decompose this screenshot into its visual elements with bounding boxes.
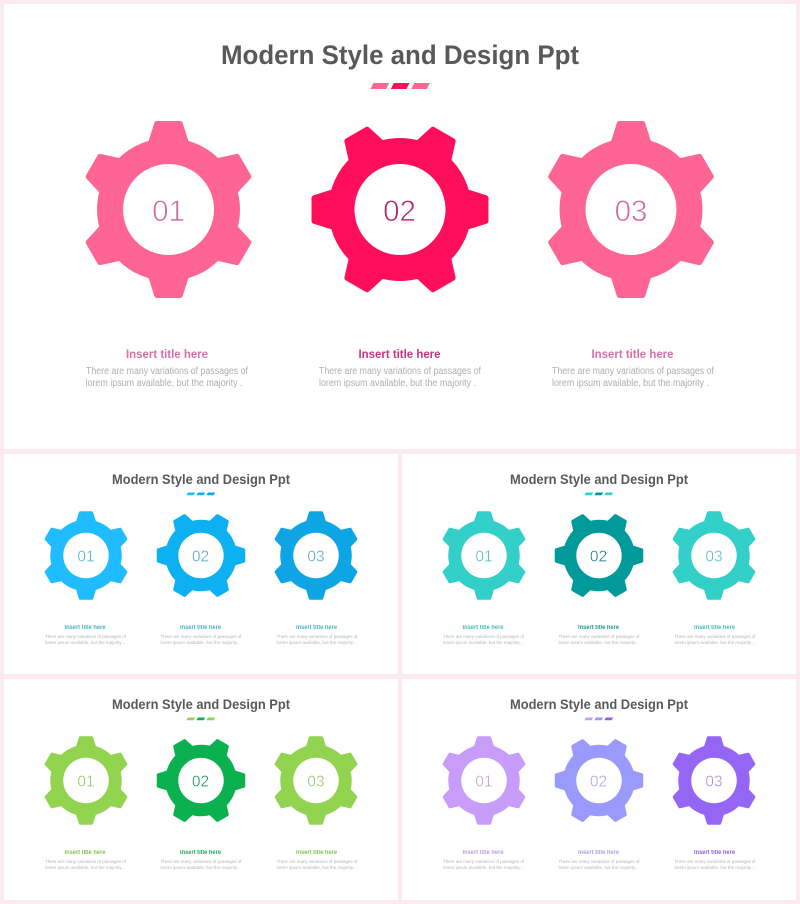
text block 01: lorem ipsum available, but the majority... <box>443 640 523 646</box>
gear 03 <box>273 736 359 825</box>
text block 02: lorem ipsum available, but the majority... <box>160 640 240 646</box>
text block 02: There are many variations of passages of <box>558 859 640 865</box>
gear 03: 03 <box>705 548 723 566</box>
gear 01 <box>441 511 527 600</box>
text block 02: There are many variations of passages of <box>160 634 242 640</box>
text block 01: Insert title here <box>462 625 504 631</box>
text block 03: Insert title here <box>592 347 674 361</box>
text block 02: There are many variations of passages of <box>160 859 242 865</box>
text block 01 <box>443 850 525 871</box>
text block 02: Insert title here <box>180 850 222 856</box>
gear 02 <box>281 90 519 329</box>
text block 01: There are many variations of passages of <box>45 859 127 865</box>
text block 03: lorem ipsum available, but the majority... <box>674 640 754 646</box>
text block 03 <box>674 625 756 646</box>
gear 02 <box>141 496 261 615</box>
text block 03: lorem ipsum available, but the majority... <box>674 865 754 871</box>
title: Modern Style and Design Ppt <box>510 697 688 712</box>
gear 01 <box>43 511 129 600</box>
gear 01 <box>82 121 255 298</box>
text block 01: Insert title here <box>126 347 208 361</box>
text block 03: Insert title here <box>296 850 338 856</box>
title accent dashes <box>370 83 430 89</box>
text block 01 <box>45 850 127 871</box>
gear 02 <box>539 721 659 840</box>
gear 03: 03 <box>307 548 325 566</box>
title accent dashes <box>186 718 215 720</box>
text block 01: There are many variations of passages of <box>45 634 127 640</box>
text block 01: Insert title here <box>462 850 504 856</box>
text block 01: Insert title here <box>64 850 106 856</box>
panel: teal slide <box>402 454 796 674</box>
text block 02: lorem ipsum available, but the majority... <box>160 865 240 871</box>
text block 02: Insert title here <box>358 347 441 361</box>
text block 02: Insert title here <box>578 625 620 631</box>
gear 03 <box>671 511 757 600</box>
gear 03 <box>671 736 757 825</box>
gear 02: 02 <box>590 548 607 566</box>
text block 01: lorem ipsum available, but the majority... <box>443 865 523 871</box>
text block 03: Insert title here <box>694 850 736 856</box>
title: Modern Style and Design Ppt <box>112 472 290 487</box>
text block 01: There are many variations of passages of <box>443 859 525 865</box>
text block 02: Insert title here <box>578 850 620 856</box>
text block 02: lorem ipsum available, but the majority... <box>558 865 638 871</box>
gear 01: 01 <box>77 548 95 566</box>
gear 03 <box>544 121 718 298</box>
text block 02 <box>319 347 481 389</box>
text block 02: There are many variations of passages of <box>558 634 640 640</box>
title accent dashes <box>186 492 215 495</box>
panel: pink main slide <box>4 4 796 449</box>
gear 02: 02 <box>192 774 209 790</box>
text block 03: There are many variations of passages of <box>552 366 714 377</box>
gear 01 <box>441 736 527 825</box>
text block 01 <box>443 625 525 646</box>
text block 02 <box>558 850 640 871</box>
text block 03: There are many variations of passages of <box>674 859 756 865</box>
title accent dashes <box>584 718 613 720</box>
gear 03: 03 <box>705 774 723 790</box>
panel: green slide <box>4 679 398 900</box>
gear 01: 01 <box>77 774 95 790</box>
gear 03 <box>273 511 359 600</box>
gear 01: 01 <box>475 548 493 566</box>
text block 02: Insert title here <box>180 625 222 631</box>
text block 03: lorem ipsum available, but the majority . <box>552 378 709 389</box>
text block 03: There are many variations of passages of <box>276 634 358 640</box>
text block 03: There are many variations of passages of <box>276 859 358 865</box>
text block 03: lorem ipsum available, but the majority... <box>276 865 356 871</box>
gear 02: 02 <box>383 195 416 228</box>
gear 02: 02 <box>192 548 209 566</box>
text block 01 <box>45 625 127 646</box>
text block 02 <box>558 625 640 646</box>
text block 01: lorem ipsum available, but the majority . <box>86 378 242 389</box>
text block 03 <box>276 625 358 646</box>
text block 03 <box>276 850 358 871</box>
text block 01: lorem ipsum available, but the majority... <box>45 640 125 646</box>
gear 01: 01 <box>475 774 493 790</box>
text block 02: lorem ipsum available, but the majority... <box>558 640 638 646</box>
text block 03: Insert title here <box>694 625 736 631</box>
gear 02: 02 <box>590 774 607 790</box>
text block 03: There are many variations of passages of <box>674 634 756 640</box>
title: Modern Style and Design Ppt <box>112 697 290 712</box>
title accent dashes <box>584 492 613 495</box>
text block 03 <box>552 347 714 389</box>
text block 02: lorem ipsum available, but the majority . <box>319 378 476 389</box>
text block 01: There are many variations of passages of <box>443 634 525 640</box>
gear 02 <box>539 496 659 615</box>
gear 03: 03 <box>307 774 325 790</box>
text block 02 <box>160 625 242 646</box>
gear 01: 01 <box>152 195 185 228</box>
text block 02: There are many variations of passages of <box>319 366 481 377</box>
text block 01: There are many variations of passages of <box>86 366 248 377</box>
text block 01: lorem ipsum available, but the majority... <box>45 865 125 871</box>
text block 01: Insert title here <box>64 625 106 631</box>
text block 03 <box>674 850 756 871</box>
panel: blue slide <box>4 454 398 674</box>
panel: purple slide <box>402 679 796 900</box>
gear 03: 03 <box>615 195 647 228</box>
text block 03: Insert title here <box>296 625 338 631</box>
text block 01 <box>86 347 248 389</box>
gear 01 <box>43 736 129 825</box>
title: Modern Style and Design Ppt <box>510 472 688 487</box>
title: Modern Style and Design Ppt <box>221 40 579 70</box>
gear 02 <box>141 721 261 840</box>
text block 03: lorem ipsum available, but the majority... <box>276 640 356 646</box>
text block 02 <box>160 850 242 871</box>
